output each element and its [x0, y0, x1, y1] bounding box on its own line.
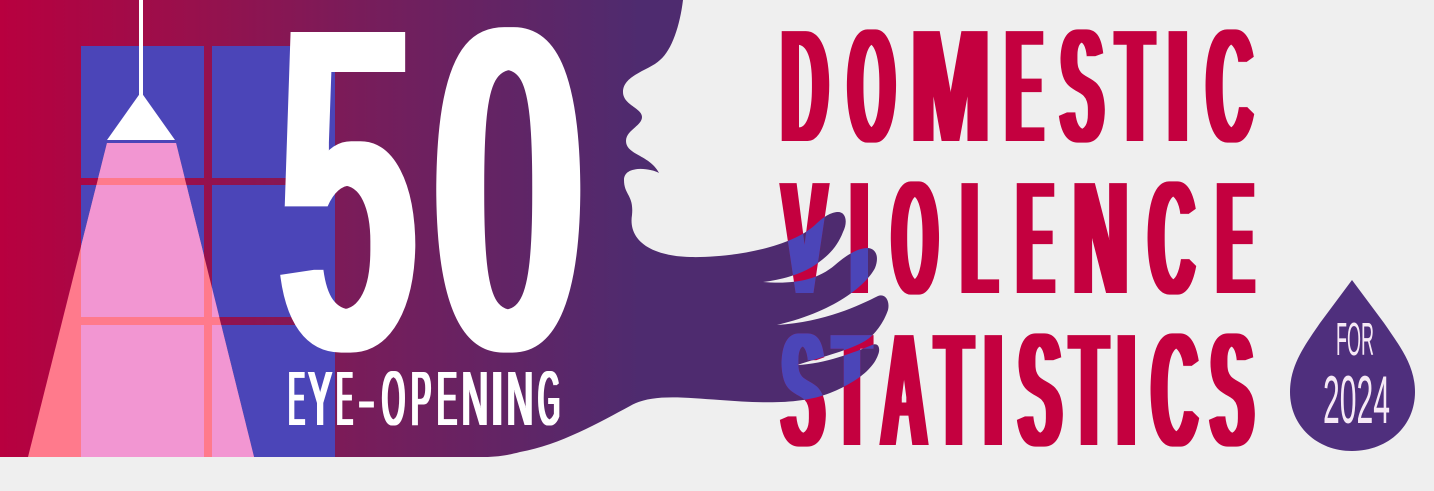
badge: drop with for 2024	[1290, 280, 1415, 451]
subheading: eye-opening: O	[382, 356, 405, 442]
icon: hanging lamp	[107, 0, 175, 140]
subheading: eye-opening: E	[289, 356, 305, 442]
subheading: eye-opening: -	[358, 356, 374, 442]
title: domestic violence statistics: I	[1117, 298, 1135, 484]
title: domestic violence statistics: C	[1149, 146, 1195, 332]
title: domestic violence statistics: L	[962, 146, 997, 332]
title: domestic violence statistics: T	[1071, 298, 1107, 484]
subheading: eye-opening: E	[437, 356, 457, 442]
title: domestic violence statistics	[781, 0, 1254, 484]
title: domestic violence statistics: I	[850, 146, 868, 332]
title: domestic violence statistics: V	[782, 146, 827, 332]
title: domestic violence statistics: E	[1017, 146, 1054, 332]
title: domestic violence statistics: O	[892, 146, 938, 332]
title: domestic violence statistics: N	[1073, 146, 1128, 332]
title: domestic violence statistics: T	[936, 298, 972, 484]
title: domestic violence statistics: T	[834, 298, 870, 484]
badge: drop with for 2024: FOR	[1336, 313, 1374, 365]
title: domestic violence statistics: C	[1152, 298, 1198, 484]
title: domestic violence statistics: S	[782, 298, 824, 484]
infographic banner: T	[834, 298, 870, 484]
subheading: eye-opening: N	[462, 356, 488, 442]
lamp light cone	[28, 143, 254, 457]
subheading: eye-opening: P	[411, 356, 431, 442]
infographic banner: E	[1217, 146, 1254, 332]
infographic banner: I	[850, 146, 868, 332]
infographic banner: G	[538, 356, 560, 442]
subheading: eye-opening: E	[337, 356, 353, 442]
title letters tinted blue where they cross the hand: S	[782, 298, 824, 484]
title letters tinted blue where they cross the hand	[782, 216, 874, 400]
infographic banner: S	[1210, 298, 1253, 484]
title letters tinted blue where they cross the hand: V	[782, 146, 827, 332]
subheading: eye-opening: Y	[308, 356, 332, 442]
title: domestic violence statistics: I	[984, 298, 1002, 484]
title: domestic violence statistics: S	[1018, 298, 1061, 484]
title: domestic violence statistics: A	[881, 298, 927, 484]
silhouette: head and hand	[0, 0, 889, 457]
subheading: eye-opening: N	[507, 356, 533, 442]
window	[81, 46, 335, 457]
subheading: eye-opening: I	[490, 356, 505, 442]
